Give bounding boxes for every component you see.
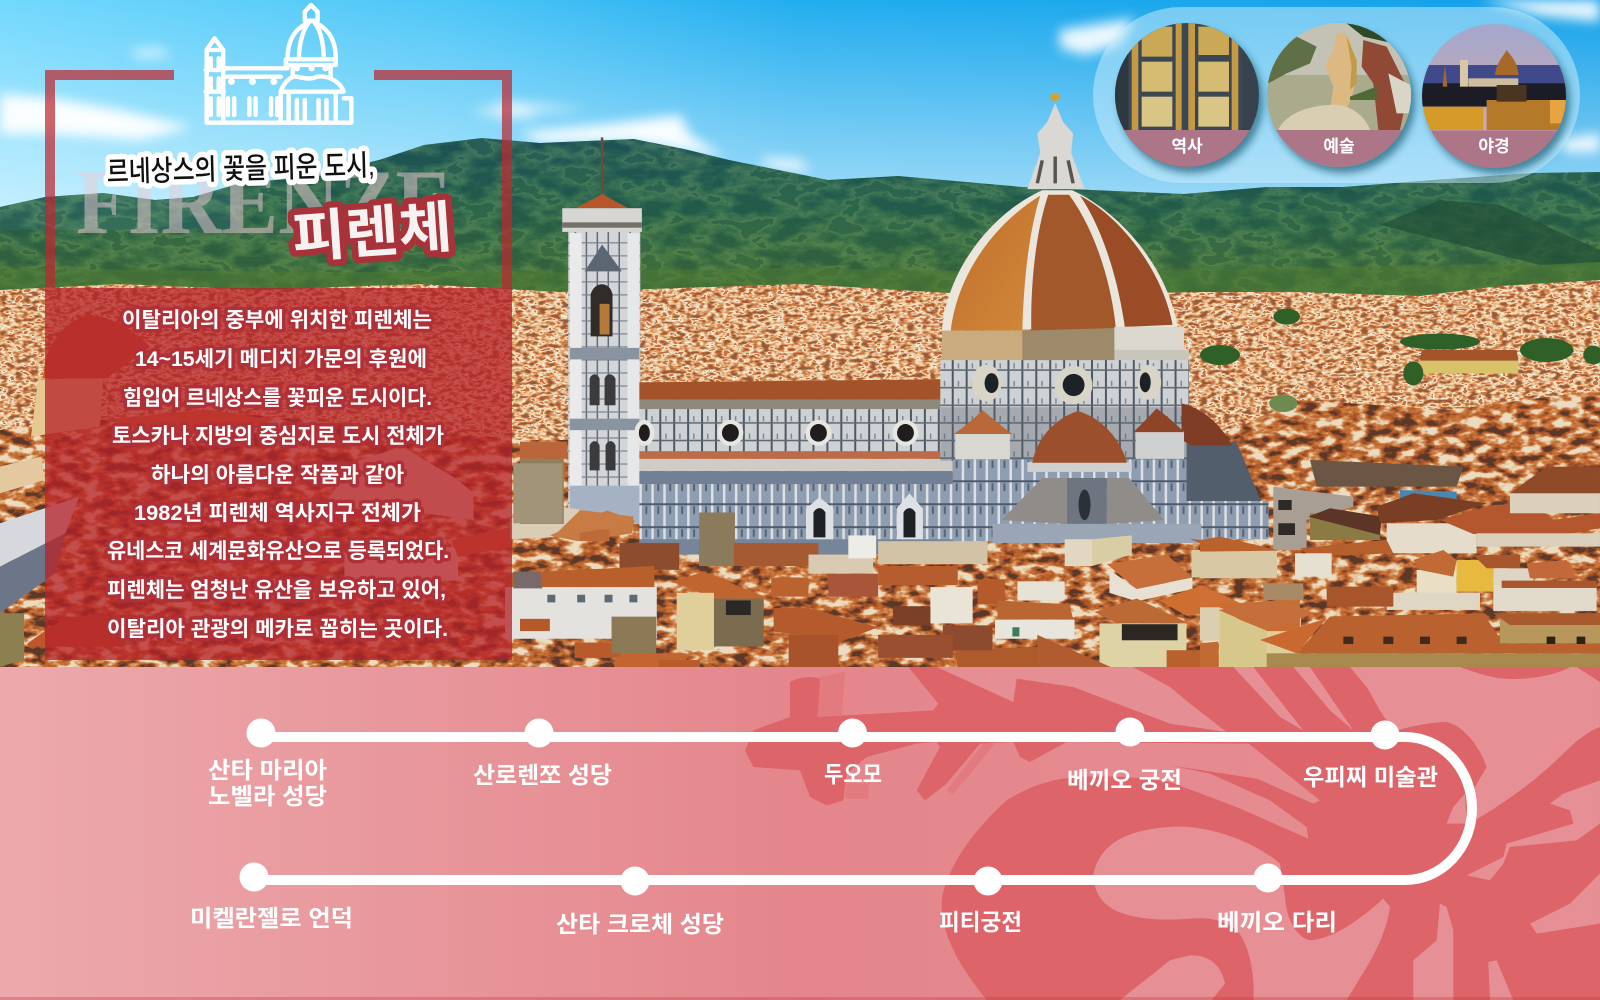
label: history: 역사 <box>1171 137 1203 156</box>
watermark FIRENZE: FIRENZE <box>76 151 452 253</box>
panel: category circles <box>1093 7 1580 183</box>
rooftops right of panel <box>513 463 700 670</box>
body text: 1982년 피렌체 역사지구 전체가 <box>134 502 421 525</box>
icon: cathedral outline <box>206 5 351 123</box>
drum with round windows <box>940 327 1189 461</box>
label: night view: 야경 <box>1478 137 1510 156</box>
sky <box>0 0 1600 320</box>
stop labels: 산로렌쪼 성당 <box>473 762 612 788</box>
right side rooftops <box>1200 309 1600 670</box>
mountains <box>0 138 1600 296</box>
stop labels: 베끼오 궁전 <box>1067 767 1182 793</box>
bottom edge strip <box>0 997 1600 1000</box>
route stops <box>240 718 1400 896</box>
stop labels: 두오모 <box>824 761 882 787</box>
stop labels: 미켈란젤로 언덕 <box>190 905 353 931</box>
body text <box>107 309 449 641</box>
Duomo cathedral and campanile <box>505 93 1301 667</box>
body text: 하나의 아름다운 작품과 같아 <box>151 464 404 487</box>
stop labels: 피티궁전 <box>939 909 1022 935</box>
heading: subtitle: 르네상스의 꽃을 피운 도시, <box>106 149 375 189</box>
red translucent panel <box>45 288 512 660</box>
left side buildings <box>0 315 513 667</box>
city far band <box>0 280 1600 440</box>
circle: history <box>1113 20 1259 170</box>
body text: 토스카나 지방의 중심지로 도시 전체가 <box>112 425 444 448</box>
nave <box>634 379 958 555</box>
decorative swirl pattern <box>745 667 1600 1000</box>
body text: 유네스코 세계문화유산으로 등록되었다. <box>107 540 449 563</box>
campanile tower <box>562 137 642 524</box>
body text: 이탈리아의 중부에 위치한 피렌체는 <box>122 309 432 332</box>
stop labels: 산타 마리아 <box>208 757 327 783</box>
stop labels: 노벨라 성당 <box>208 783 327 809</box>
background photo: Florence cityscape with the Duomo <box>0 0 1600 670</box>
dome <box>942 93 1178 331</box>
bottom band with timeline <box>0 667 1600 1000</box>
body text: 피렌체는 엄청난 유산을 보유하고 있어, <box>107 579 446 602</box>
stop labels <box>190 757 1438 937</box>
frame <box>45 70 512 288</box>
tribunes and small domes <box>953 403 1269 543</box>
stop labels: 우피찌 미술관 <box>1303 764 1438 790</box>
body text: 힘입어 르네상스를 꽃피운 도시이다. <box>123 387 432 410</box>
stop labels: 산타 크로체 성당 <box>556 911 724 937</box>
foreground rooftops <box>505 442 1301 667</box>
city near band <box>0 390 1600 667</box>
heading: title: 피렌체 <box>290 195 454 269</box>
body text: 14~15세기 메디치 가문의 후원에 <box>135 348 427 371</box>
body text: 이탈리아 관광의 메카로 꼽히는 곳이다. <box>107 618 448 641</box>
circle: night view <box>1420 24 1570 170</box>
panel: red text panel and frame <box>45 5 512 660</box>
stop labels: 베끼오 다리 <box>1217 909 1337 935</box>
circle: art <box>1267 23 1413 170</box>
route line <box>254 737 1472 880</box>
band background <box>0 667 1600 1000</box>
label: art: 예술 <box>1323 137 1355 156</box>
capsule background <box>1093 7 1580 183</box>
